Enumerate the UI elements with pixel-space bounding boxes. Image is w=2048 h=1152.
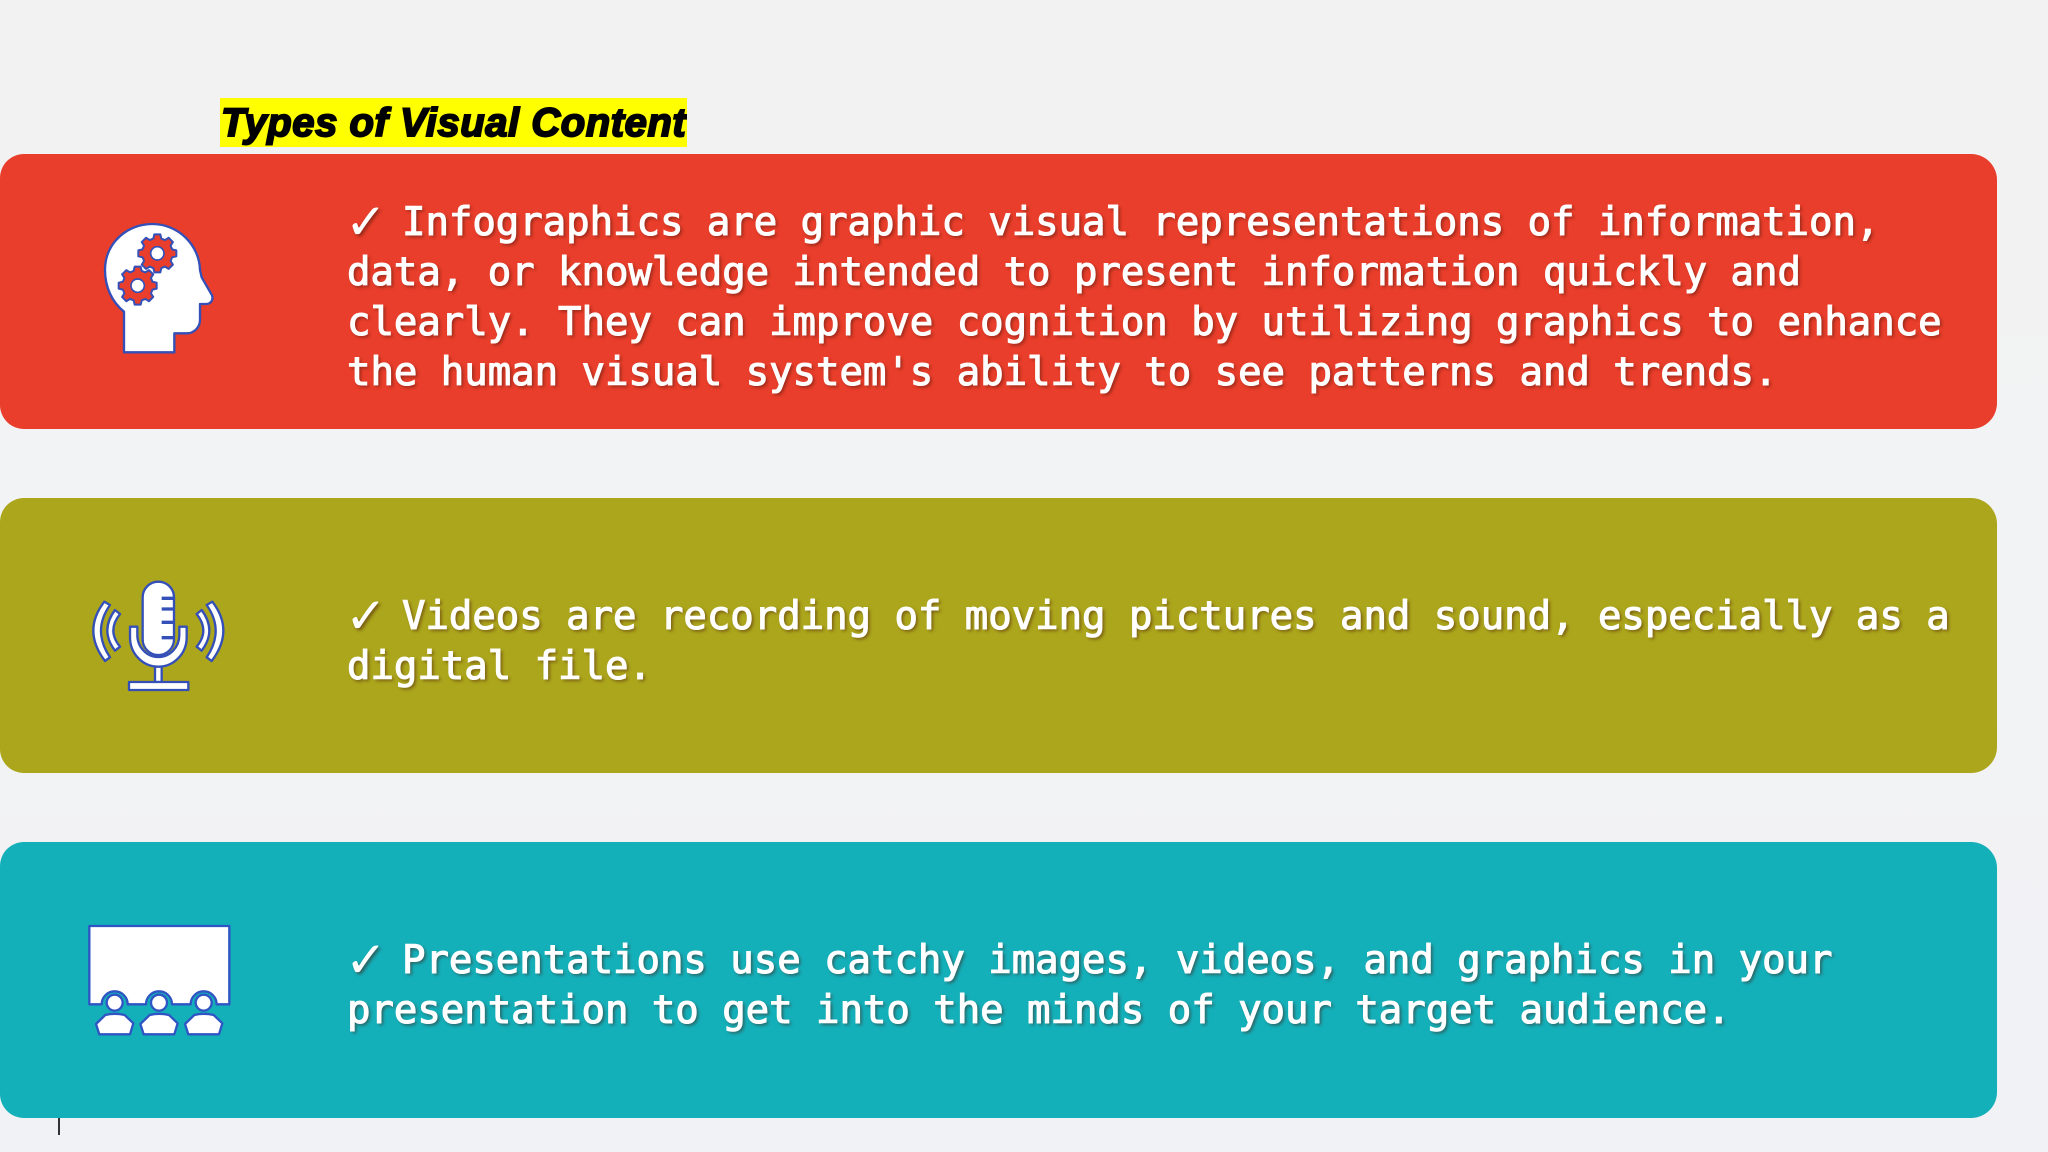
text: infographics description: Infographics are graphic visual representations of information, bbox=[402, 200, 1879, 245]
text: infographics description: the human visual system's ability to see patterns and trends. bbox=[347, 350, 1777, 395]
text: videos description: digital file. bbox=[347, 644, 652, 689]
text: infographics description: data, or knowledge intended to present information quickly and bbox=[347, 250, 1801, 295]
panel: videos bbox=[0, 498, 1997, 773]
text: infographics description bbox=[345, 193, 1944, 397]
panel: presentations bbox=[0, 842, 1997, 1118]
text: videos description: ✓ bbox=[345, 587, 387, 645]
title: Types of Visual Content bbox=[221, 101, 686, 145]
cursor mark bbox=[58, 1118, 60, 1135]
text: presentations description: Presentations use catchy images, videos, and graphics in your bbox=[402, 938, 1832, 983]
text: presentations description: presentation to get into the minds of your target audience. bbox=[347, 988, 1731, 1033]
icon: presentation audience bbox=[88, 924, 230, 1036]
icon: head with gears bbox=[104, 222, 214, 354]
text: videos description: Videos are recording of moving pictures and sound, especially as a bbox=[402, 594, 1950, 639]
text: videos description bbox=[345, 587, 1950, 692]
text: infographics description: ✓ bbox=[345, 193, 387, 251]
panel: infographics bbox=[0, 154, 1997, 429]
text: presentations description bbox=[345, 931, 1835, 1036]
text: presentations description: ✓ bbox=[345, 931, 387, 989]
text: infographics description: clearly. They can improve cognition by utilizing graphics to enhance bbox=[347, 300, 1942, 345]
icon: microphone bbox=[92, 580, 224, 692]
